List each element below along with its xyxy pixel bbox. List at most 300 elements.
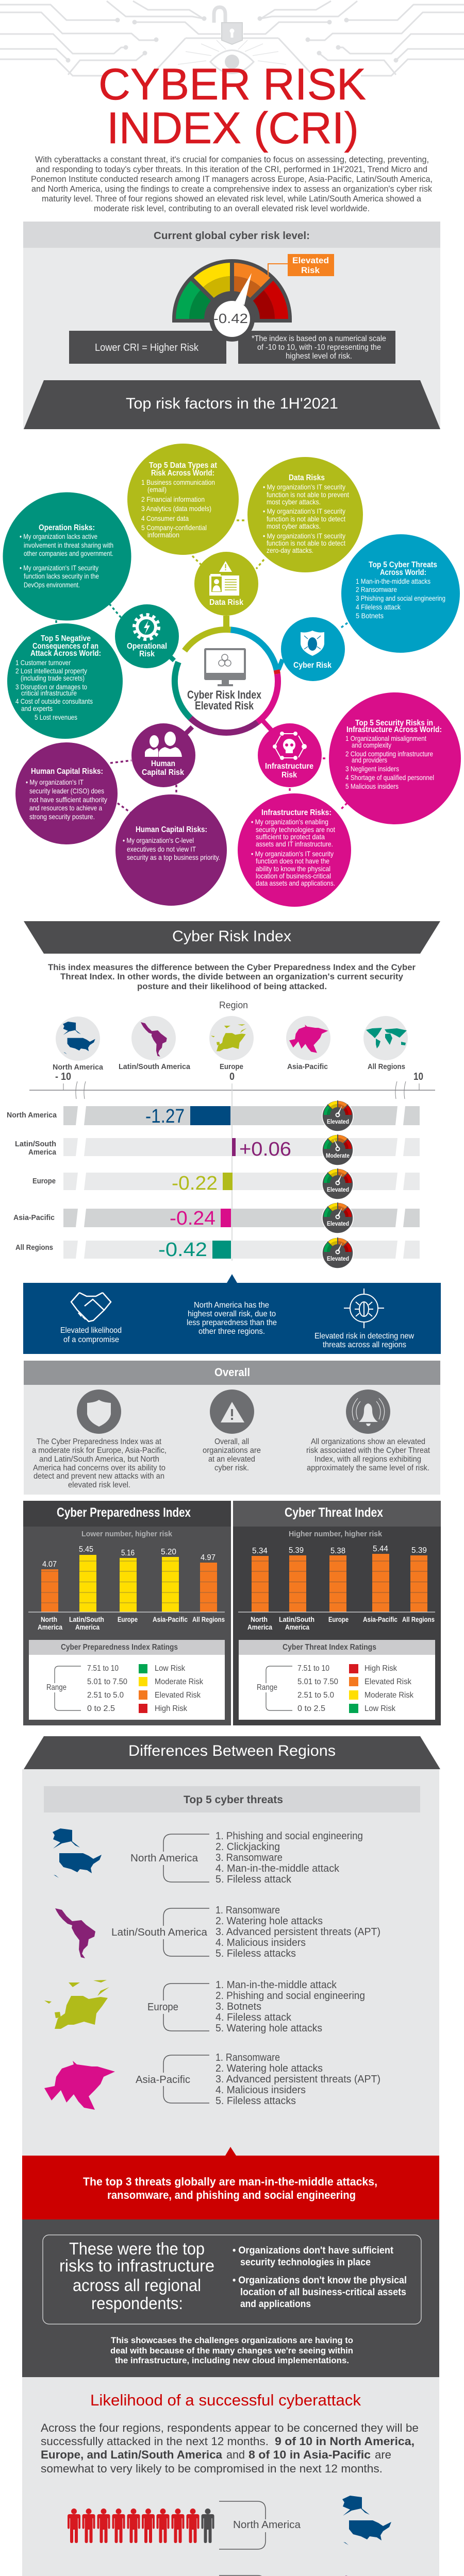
bar chart: threat: All Regions xyxy=(402,1615,435,1623)
region: Latin/South America threats: 5. Fileless attacks xyxy=(216,1948,296,1959)
bubble: operation risks: Operation Risks: xyxy=(39,523,95,532)
text: elevated likelihood xyxy=(60,1326,122,1344)
legend: preparedness ratings: Cyber Preparedness Index Ratings xyxy=(61,1643,178,1652)
region: North America threats: 5. Fileless attack xyxy=(216,1874,292,1885)
banner: cyber risk index: Cyber Risk Index xyxy=(172,928,291,945)
heading: region: Region xyxy=(219,1000,248,1010)
bubble: operation risks: • My organization lacks active xyxy=(20,532,97,540)
bar chart: preparedness: 5.45 xyxy=(79,1545,93,1554)
region: Asia-Pacific threats: 1. Ransomware xyxy=(216,2052,280,2063)
row: Europe: Europe xyxy=(32,1177,56,1185)
region labels: Europe xyxy=(220,1062,243,1071)
text: overall elevated: cyber risk. xyxy=(214,1464,249,1472)
icon: bug in target xyxy=(344,1289,384,1328)
row: North America: North America xyxy=(7,1111,57,1120)
subheading: Higher number, higher risk xyxy=(289,1530,383,1538)
bar chart: preparedness: 4.07 xyxy=(42,1560,57,1569)
bubble: human capital risks left xyxy=(15,742,118,844)
panel: North America callout xyxy=(23,1274,441,1354)
bubble: operation risks xyxy=(3,493,131,620)
bubble: data risks xyxy=(247,457,363,572)
bubble: human capital risks center: executives do not view IT xyxy=(127,845,196,853)
bubble: top 5 data types: Risk Across World: xyxy=(151,469,214,478)
text: highest overall risk: North America has the xyxy=(194,1301,269,1310)
row: Latin/South America people xyxy=(68,2575,386,2576)
text block: somewhat to very likely to be compromised in the next 12 months. xyxy=(41,2462,383,2475)
legend: preparedness ratings: 5.01 to 7.50 xyxy=(87,1677,127,1686)
subheading: Lower number, higher risk xyxy=(81,1530,173,1538)
bubble: human capital risks center: • My organization's C-level xyxy=(123,836,194,844)
bubble: top 5 data types: 4 Consumer data xyxy=(141,514,189,522)
list: infrastructure risks: • Organizations don't know the physical xyxy=(233,2275,407,2286)
bubble: top 5 data types: 3 Analytics (data models) xyxy=(141,504,211,513)
bubble: top 5 security risks: 5 Malicious insiders xyxy=(345,782,399,790)
text block: Europe, and Latin/South America xyxy=(41,2448,223,2461)
region labels xyxy=(53,1062,405,1072)
bubble: top 5 negative consequences: Attack Across World: xyxy=(30,649,101,658)
bubble: top 5 security risks: 2 Cloud computing infrastructure xyxy=(345,750,433,758)
text: preparedness: detect and prevent new attacks with an xyxy=(34,1472,164,1481)
heading: top risks: risks to infrastructure xyxy=(59,2256,214,2275)
bubble: infrastructure risks: • My organization's enabling xyxy=(251,818,328,826)
bubble: top 5 negative consequences: 2 Lost intellectual property xyxy=(15,667,87,675)
heading: Cyber Preparedness Index xyxy=(57,1505,191,1520)
node: operational risk: Risk xyxy=(139,650,155,658)
heading: Cyber Threat Index xyxy=(285,1505,383,1520)
node: infrastructure risk xyxy=(258,723,322,787)
row: Latin/South America xyxy=(15,1134,420,1165)
box: lower CRI equals higher risk xyxy=(69,331,226,364)
panel: differences between regions xyxy=(22,1736,440,2156)
list: infrastructure risks xyxy=(233,2245,407,2310)
callout: top 3 threats globally: The top 3 threats globally are man-in-the-middle attacks, xyxy=(83,2175,377,2188)
axis: 0 xyxy=(229,1071,235,1082)
legend: threat ratings: 2.51 to 5.0 xyxy=(297,1691,334,1700)
legend: threat ratings: Range xyxy=(257,1683,277,1692)
intro text block: moderate risk level, contributing to an overall elevated risk level worldwide. xyxy=(94,204,370,213)
bar chart: preparedness xyxy=(28,1545,225,1631)
region: Europe threats: 3. Botnets xyxy=(216,2001,261,2012)
bubble: top 5 security risks: 3 Negligent insiders xyxy=(345,765,399,773)
text block: index definition: This index measures the difference between the Cyber Preparedness Index and the Cyber xyxy=(48,962,416,972)
region labels: North America xyxy=(53,1063,104,1072)
text block: are xyxy=(375,2448,391,2461)
heading: Likelihood of a successful cyberattack xyxy=(90,2391,361,2409)
bubble: top 5 cyber threats: 3 Phishing and social engineering xyxy=(356,594,445,602)
region: Europe threats: 1. Man-in-the-middle attack xyxy=(216,1979,337,1991)
axis: 10 xyxy=(413,1071,423,1082)
bar chart: threat: America xyxy=(247,1623,272,1631)
banner: top risk factors xyxy=(24,380,440,429)
legend: threat ratings: High Risk xyxy=(364,1664,397,1673)
region: Asia-Pacific threats: 3. Advanced persistent threats (APT) xyxy=(216,2074,380,2085)
title xyxy=(98,60,366,153)
node: human capital risk xyxy=(131,723,195,787)
node: operational risk: Operational xyxy=(127,642,167,651)
region labels: Latin/South America xyxy=(119,1062,191,1071)
region: Asia-Pacific threats: 2. Watering hole attacks xyxy=(216,2063,323,2074)
node: infrastructure risk: Risk xyxy=(281,771,297,779)
region: Europe threats: 2. Phishing and social engineering xyxy=(216,1990,365,2002)
panel: likelihood of a successful cyberattack xyxy=(22,2377,439,2576)
bubble: top 5 security risks: and complexity xyxy=(352,741,391,749)
bar chart: threat: America xyxy=(285,1623,309,1631)
gauge: risk level -0.42: -0.42 xyxy=(213,311,248,326)
node: human capital risk: Human xyxy=(151,759,175,768)
bar chart: threat: Latin/South xyxy=(279,1615,314,1623)
text: elevated likelihood: of a compromise xyxy=(63,1335,119,1344)
row: North America people: North America xyxy=(233,2519,301,2531)
bubble: top 5 negative consequences: 5 Lost revenues xyxy=(35,713,77,721)
row: All Regions xyxy=(15,1238,420,1268)
text block: Across the four regions, respondents appear to be concerned they will be xyxy=(41,2421,419,2434)
label: cyber risk index elevated: Cyber Risk Index xyxy=(187,688,262,701)
text: challenges: deal with because of the many changes we're seeing within xyxy=(110,2346,353,2355)
bar chart: preparedness: All Regions xyxy=(192,1615,225,1623)
text: preparedness: The Cyber Preparedness Index was at xyxy=(37,1437,162,1446)
bar chart: threat: Europe xyxy=(328,1615,349,1623)
legend: preparedness ratings: 2.51 to 5.0 xyxy=(87,1691,124,1700)
icon: gear with lightning xyxy=(134,615,159,639)
legend: preparedness ratings: Range xyxy=(46,1683,67,1692)
row: All Regions: All Regions xyxy=(15,1243,53,1252)
bubble: human capital risks left: strong security posture. xyxy=(29,812,95,821)
text: elevated likelihood: Elevated likelihood xyxy=(60,1326,122,1335)
bubble: human capital risks left: • My organization's IT xyxy=(26,778,84,786)
legend: threat ratings: Low Risk xyxy=(364,1704,396,1713)
subheading: top 5 cyber threats: Top 5 cyber threats xyxy=(184,1794,283,1806)
intro text block xyxy=(31,155,433,213)
row: All Regions: -0.42 xyxy=(158,1239,207,1261)
bubble: human capital risks left: and resources to achieve a xyxy=(29,804,102,812)
text: preparedness xyxy=(32,1437,167,1489)
bar chart: preparedness: Latin/South xyxy=(69,1615,104,1623)
node: infrastructure risk: Infrastructure xyxy=(265,762,313,771)
bubble: top 5 security risks xyxy=(329,692,461,824)
dashed connectors xyxy=(56,520,347,812)
list: infrastructure risks: security technologies in place xyxy=(240,2257,371,2268)
bubble: infrastructure risks: function does not have the xyxy=(256,857,329,865)
bubble: human capital risks center: security as a top business priority. xyxy=(127,853,220,861)
bar chart: preparedness: America xyxy=(75,1623,100,1631)
bubble: data risks: Data Risks xyxy=(289,473,325,482)
bar chart: threat xyxy=(238,1545,435,1631)
row: Europe: Elevated xyxy=(327,1187,349,1193)
icon: open padlock xyxy=(214,7,242,44)
bubble: infrastructure risks: Infrastructure Risks: xyxy=(261,808,332,817)
bubble: top 5 security risks: Infrastructure Across World: xyxy=(346,725,442,734)
callout: elevated risk: Elevated xyxy=(292,256,329,265)
text block: index definition: Threat Index. In other words, the divide between an organization's current security xyxy=(60,972,404,981)
text: highest overall risk: highest overall risk, due to xyxy=(188,1310,276,1318)
intro text block: With cyberattacks a constant threat, it's crucial for companies to focus on assessing, detecting, preventing, xyxy=(35,155,429,164)
region map icons xyxy=(56,1016,408,1061)
bubble: data risks: zero-day attacks. xyxy=(267,546,313,554)
bubble: data risks: function is not able to detect xyxy=(267,515,345,523)
text block: index definition: posture and their likelihood of being attacked. xyxy=(137,981,327,991)
intro text block: and responding to today's cyber threats. In this iteration of the CRI, performed in 1H'2021, Trend Micro and xyxy=(36,165,427,174)
bubble: infrastructure risks: sufficient to protect data xyxy=(256,833,325,841)
region: North America threats: 1. Phishing and social engineering xyxy=(216,1831,363,1842)
region: North America threats xyxy=(53,1828,363,1885)
heading: top risks: across all regional xyxy=(73,2276,201,2295)
bubble: top 5 cyber threats: 5 Botnets xyxy=(356,612,384,620)
region: Europe threats: Europe xyxy=(147,2002,178,2013)
text: threat: risk associated with the Cyber Threat xyxy=(306,1446,430,1455)
legend: preparedness ratings: High Risk xyxy=(155,1704,188,1713)
legend: threat ratings: Cyber Threat Index Ratings xyxy=(283,1643,376,1652)
text block xyxy=(41,2421,419,2475)
row: North America people xyxy=(68,2496,391,2549)
bubble: top 5 cyber threats: 4 Fileless attack xyxy=(356,603,401,611)
row: Asia-Pacific: -0.24 xyxy=(170,1208,216,1229)
box: lower CRI equals higher risk: Lower CRI = Higher Risk xyxy=(95,342,199,353)
bubble: top 5 negative consequences: Consequences of an xyxy=(32,642,98,651)
icon: two people xyxy=(145,732,182,757)
region: Latin/South America threats: 4. Malicious insiders xyxy=(216,1937,306,1948)
legend: threat ratings: Moderate Risk xyxy=(364,1691,414,1700)
row: Europe xyxy=(32,1168,420,1199)
callout: top 3 threats globally xyxy=(22,2147,439,2219)
region: Latin/South America threats: 2. Watering hole attacks xyxy=(216,1916,323,1927)
bubble: infrastructure risks xyxy=(238,793,351,907)
legend: threat ratings: 0 to 2.5 xyxy=(297,1704,325,1713)
bubble: top 5 data types: Top 5 Data Types at xyxy=(149,461,218,470)
chart: cyber risk index by region xyxy=(7,1000,435,1268)
row: North America xyxy=(7,1100,420,1131)
bubble: data risks: most cyber attacks. xyxy=(267,522,321,530)
icon: handshake xyxy=(71,1293,111,1321)
icon: monitor with biohazard xyxy=(204,648,246,686)
node: cyber risk: Cyber Risk xyxy=(293,661,332,670)
bar chart: threat: 5.38 xyxy=(330,1547,345,1555)
region: Asia-Pacific threats: Asia-Pacific xyxy=(136,2074,190,2086)
bubble: human capital risks left: Human Capital Risks: xyxy=(31,767,103,776)
legend: preparedness ratings: Low Risk xyxy=(155,1664,186,1673)
bar chart: threat: Asia-Pacific xyxy=(363,1615,397,1623)
intro text block: and North America, using the findings to create a comprehensive index to assess an organization's cyber risk xyxy=(31,184,433,194)
region: Latin/South America threats: Latin/South America xyxy=(111,1927,208,1938)
panel: risks to infrastructure xyxy=(22,2219,439,2377)
row: Latin/South America: Moderate xyxy=(326,1153,350,1159)
region labels: Asia-Pacific xyxy=(287,1062,328,1071)
bubble: infrastructure risks: security technologies are not xyxy=(256,825,335,834)
bubble: top 5 cyber threats xyxy=(341,534,460,653)
bar chart: preparedness: North xyxy=(41,1615,57,1623)
banner: differences between regions: Differences Between Regions xyxy=(128,1742,336,1759)
bar chart: threat: 5.39 xyxy=(411,1546,427,1555)
node: data risk: Data Risk xyxy=(209,598,243,607)
bubble: top 5 security risks: 4 Shortage of qualified personnel xyxy=(345,773,434,782)
text: overall elevated: organizations are xyxy=(203,1446,261,1455)
region: North America threats: 2. Clickjacking xyxy=(216,1841,280,1853)
region: North America threats: North America xyxy=(130,1853,198,1864)
icon: shield with bug xyxy=(301,631,324,656)
region: Asia-Pacific threats: 4. Malicious insiders xyxy=(216,2084,306,2096)
text: threat: approximately the same level of risk. xyxy=(307,1464,429,1472)
banner: cyber risk index xyxy=(24,921,440,954)
legend: threat ratings xyxy=(239,1640,435,1720)
bubble: infrastructure risks: assets and IT infrastructure. xyxy=(256,840,333,848)
node: human capital risk: Capital Risk xyxy=(142,768,184,777)
row: Latin/South America: America xyxy=(28,1148,57,1157)
text: elevated risk detecting threats: Elevated risk in detecting new xyxy=(314,1332,414,1341)
bubble: data risks: • My organization's IT security xyxy=(263,483,345,491)
bubble: operation risks: DevOps environment. xyxy=(24,581,80,589)
icon: shield xyxy=(77,1389,121,1434)
central ring: cyber risk index xyxy=(168,616,283,734)
heading: Overall xyxy=(214,1366,250,1379)
bar chart: preparedness: Europe xyxy=(118,1615,138,1623)
text: elevated risk detecting threats: threats across all regions xyxy=(323,1341,406,1349)
region: North America threats: 3. Ransomware xyxy=(216,1852,283,1863)
bar chart: threat: 5.39 xyxy=(289,1546,304,1555)
bubble: top 5 security risks: and providers xyxy=(352,756,387,764)
bubble: top 5 negative consequences xyxy=(7,623,123,739)
callout: elevated risk xyxy=(268,254,334,276)
title: INDEX (CRI) xyxy=(107,104,359,153)
text block: 9 of 10 in North America, xyxy=(275,2435,415,2448)
text: challenges: This showcases the challenges organizations are having to xyxy=(111,2335,353,2345)
bar chart: preparedness: Asia-Pacific xyxy=(153,1615,188,1623)
text: challenges: the infrastructure, including new cloud implementations. xyxy=(115,2355,349,2365)
text block: and xyxy=(226,2448,245,2461)
bubble: top 5 cyber threats: Across World: xyxy=(380,568,426,577)
intro text block: Ponemon Institute conducted research among IT managers across Europe, Asia-Pacific, Latin/South America, xyxy=(31,175,433,184)
row: Asia-Pacific xyxy=(13,1202,420,1233)
heading: top risks xyxy=(59,2239,214,2313)
row: Latin/South America: +0.06 xyxy=(239,1139,291,1160)
panel: cyber preparedness index xyxy=(23,1501,231,1725)
label: cyber risk index elevated xyxy=(187,688,262,712)
panel: overall xyxy=(24,1361,440,1495)
box: index scale note: of -10 to 10, with -10 representing the xyxy=(257,343,381,352)
text: preparedness: America had concerns over its ability to xyxy=(33,1464,165,1472)
banner: differences between regions xyxy=(24,1736,440,1769)
bar chart: threat: 5.34 xyxy=(252,1547,268,1555)
region: Asia-Pacific threats: 5. Fileless attacks xyxy=(216,2095,296,2107)
text: preparedness: and Latin/South America, but North xyxy=(39,1455,159,1464)
text block: 8 of 10 in Asia-Pacific xyxy=(248,2448,371,2461)
bubble: top 5 negative consequences: 1 Customer turnover xyxy=(15,658,71,667)
callout: top 3 threats globally: ransomware, and phishing and social engineering xyxy=(107,2189,356,2201)
bubble: top 5 cyber threats: Top 5 Cyber Threats xyxy=(369,561,437,569)
axis: - 10 xyxy=(55,1071,71,1082)
box: index scale note: *The index is based on a numerical scale xyxy=(252,334,386,343)
bubble: top 5 data types xyxy=(127,444,239,555)
bubble: human capital risks left: security leader (CISO) does xyxy=(29,787,104,795)
panel: cyber threat index xyxy=(233,1501,441,1725)
text: elevated risk detecting threats xyxy=(314,1332,414,1349)
icon: alarm bell xyxy=(346,1389,390,1434)
bubble: top 5 cyber threats: 2 Ransomware xyxy=(356,585,397,594)
bubble: data risks: most cyber attacks. xyxy=(267,498,321,506)
legend: preparedness ratings: Moderate Risk xyxy=(155,1677,204,1686)
bubble: infrastructure risks: location of business-critical xyxy=(256,872,331,880)
text: highest overall risk xyxy=(187,1301,277,1336)
list: infrastructure risks: • Organizations don't have sufficient xyxy=(233,2245,394,2256)
bar chart: preparedness: 4.97 xyxy=(201,1553,216,1562)
bubble: top 5 negative consequences: critical infrastructure xyxy=(21,689,77,697)
legend: threat ratings: 7.51 to 10 xyxy=(297,1664,329,1673)
bubble: top 5 data types: 5 Company-confidential xyxy=(141,523,207,532)
subheading: top 5 cyber threats xyxy=(44,1786,420,1812)
bubble: operation risks: other companies and government. xyxy=(24,549,113,557)
legend: preparedness ratings: Elevated Risk xyxy=(155,1691,201,1700)
bubble: top 5 security risks: Top 5 Security Risks in xyxy=(355,719,433,727)
bar chart: preparedness: 5.20 xyxy=(161,1548,176,1556)
panel: current global cyber risk level xyxy=(23,222,440,429)
text: highest overall risk: less preparedness than the xyxy=(187,1318,277,1327)
node: cyber risk xyxy=(281,617,345,681)
box: index scale note xyxy=(238,331,395,364)
title: CYBER RISK xyxy=(98,60,366,109)
bubble: infrastructure risks: data assets and applications. xyxy=(256,879,335,887)
bar chart: preparedness: America xyxy=(38,1623,62,1631)
bubble: data risks: • My organization's IT security xyxy=(263,507,345,515)
label: cyber risk index elevated: Elevated Risk xyxy=(195,699,254,712)
bubble: operation risks: function lacks security in the xyxy=(24,572,99,580)
region: North America threats: 4. Man-in-the-middle attack xyxy=(216,1863,340,1874)
bubble: top 5 data types: (email) xyxy=(147,485,167,494)
text: highest overall risk: other three regions. xyxy=(198,1327,265,1336)
bubble: top 5 data types: 1 Business communication xyxy=(141,478,215,486)
text: threat: All organizations show an elevated xyxy=(311,1437,425,1446)
box: index scale note: highest level of risk. xyxy=(286,352,352,361)
region labels: All Regions xyxy=(368,1062,405,1071)
heading: top risks: These were the top xyxy=(69,2239,205,2258)
row: North America: Elevated xyxy=(327,1119,349,1125)
row: Europe: -0.22 xyxy=(172,1173,218,1194)
bubble: top 5 negative consequences: and experts xyxy=(21,704,53,713)
header circuit artwork with lock and eye xyxy=(0,1,464,76)
bubble: infrastructure risks: ability to know the physical xyxy=(256,865,330,873)
text: overall elevated: at an elevated xyxy=(208,1455,255,1464)
region: Latin/South America threats: 1. Ransomware xyxy=(216,1905,280,1916)
bubble: data risks: function is not able to prevent xyxy=(267,490,349,499)
gauge: risk level -0.42 xyxy=(172,259,292,342)
region: Latin/South America threats xyxy=(55,1905,380,1959)
bubble: top 5 negative consequences: (including trade secrets) xyxy=(21,674,85,682)
row: All Regions: Elevated xyxy=(327,1256,349,1262)
bubble: top 5 data types: information xyxy=(147,531,179,539)
text: threat xyxy=(306,1437,430,1472)
banner: top risk factors: Top risk factors in the 1H'2021 xyxy=(126,395,338,412)
list: infrastructure risks: location of all business-critical assets xyxy=(240,2287,406,2298)
region: Europe threats xyxy=(44,1979,365,2034)
bubble: top 5 cyber threats: 1 Man-in-the-middle attacks xyxy=(356,577,430,585)
row: Asia-Pacific: Asia-Pacific xyxy=(13,1213,55,1222)
list: infrastructure risks: and applications xyxy=(240,2299,311,2310)
bar chart: threat: North xyxy=(251,1615,268,1623)
row: Latin/South America: Latin/South xyxy=(15,1140,56,1148)
text: overall elevated xyxy=(203,1437,261,1472)
region: Latin/South America threats: 3. Advanced persistent threats (APT) xyxy=(216,1926,380,1938)
heading: Current global cyber risk level: xyxy=(154,230,310,242)
bubble: data risks: function is not able to detect xyxy=(267,539,345,547)
legend: preparedness ratings: 7.51 to 10 xyxy=(87,1664,119,1673)
icon: warning xyxy=(210,1389,254,1434)
text block: successfully attacked in the next 12 months. xyxy=(41,2435,269,2448)
bar chart: threat: 5.44 xyxy=(373,1545,388,1553)
bubble: data risks: • My organization's IT security xyxy=(263,532,345,540)
bubble: human capital risks center xyxy=(115,794,227,906)
icon: skull network xyxy=(273,732,307,760)
intro text block: maturity level. Three of four regions showed an elevated risk level, while Latin/South America showed a xyxy=(42,194,422,204)
axis xyxy=(29,1071,435,1261)
text: preparedness: a moderate risk for Europe, Asia-Pacific, xyxy=(32,1446,167,1455)
bubble: top 5 negative consequences: 3 Disruption or damages to xyxy=(15,683,87,691)
